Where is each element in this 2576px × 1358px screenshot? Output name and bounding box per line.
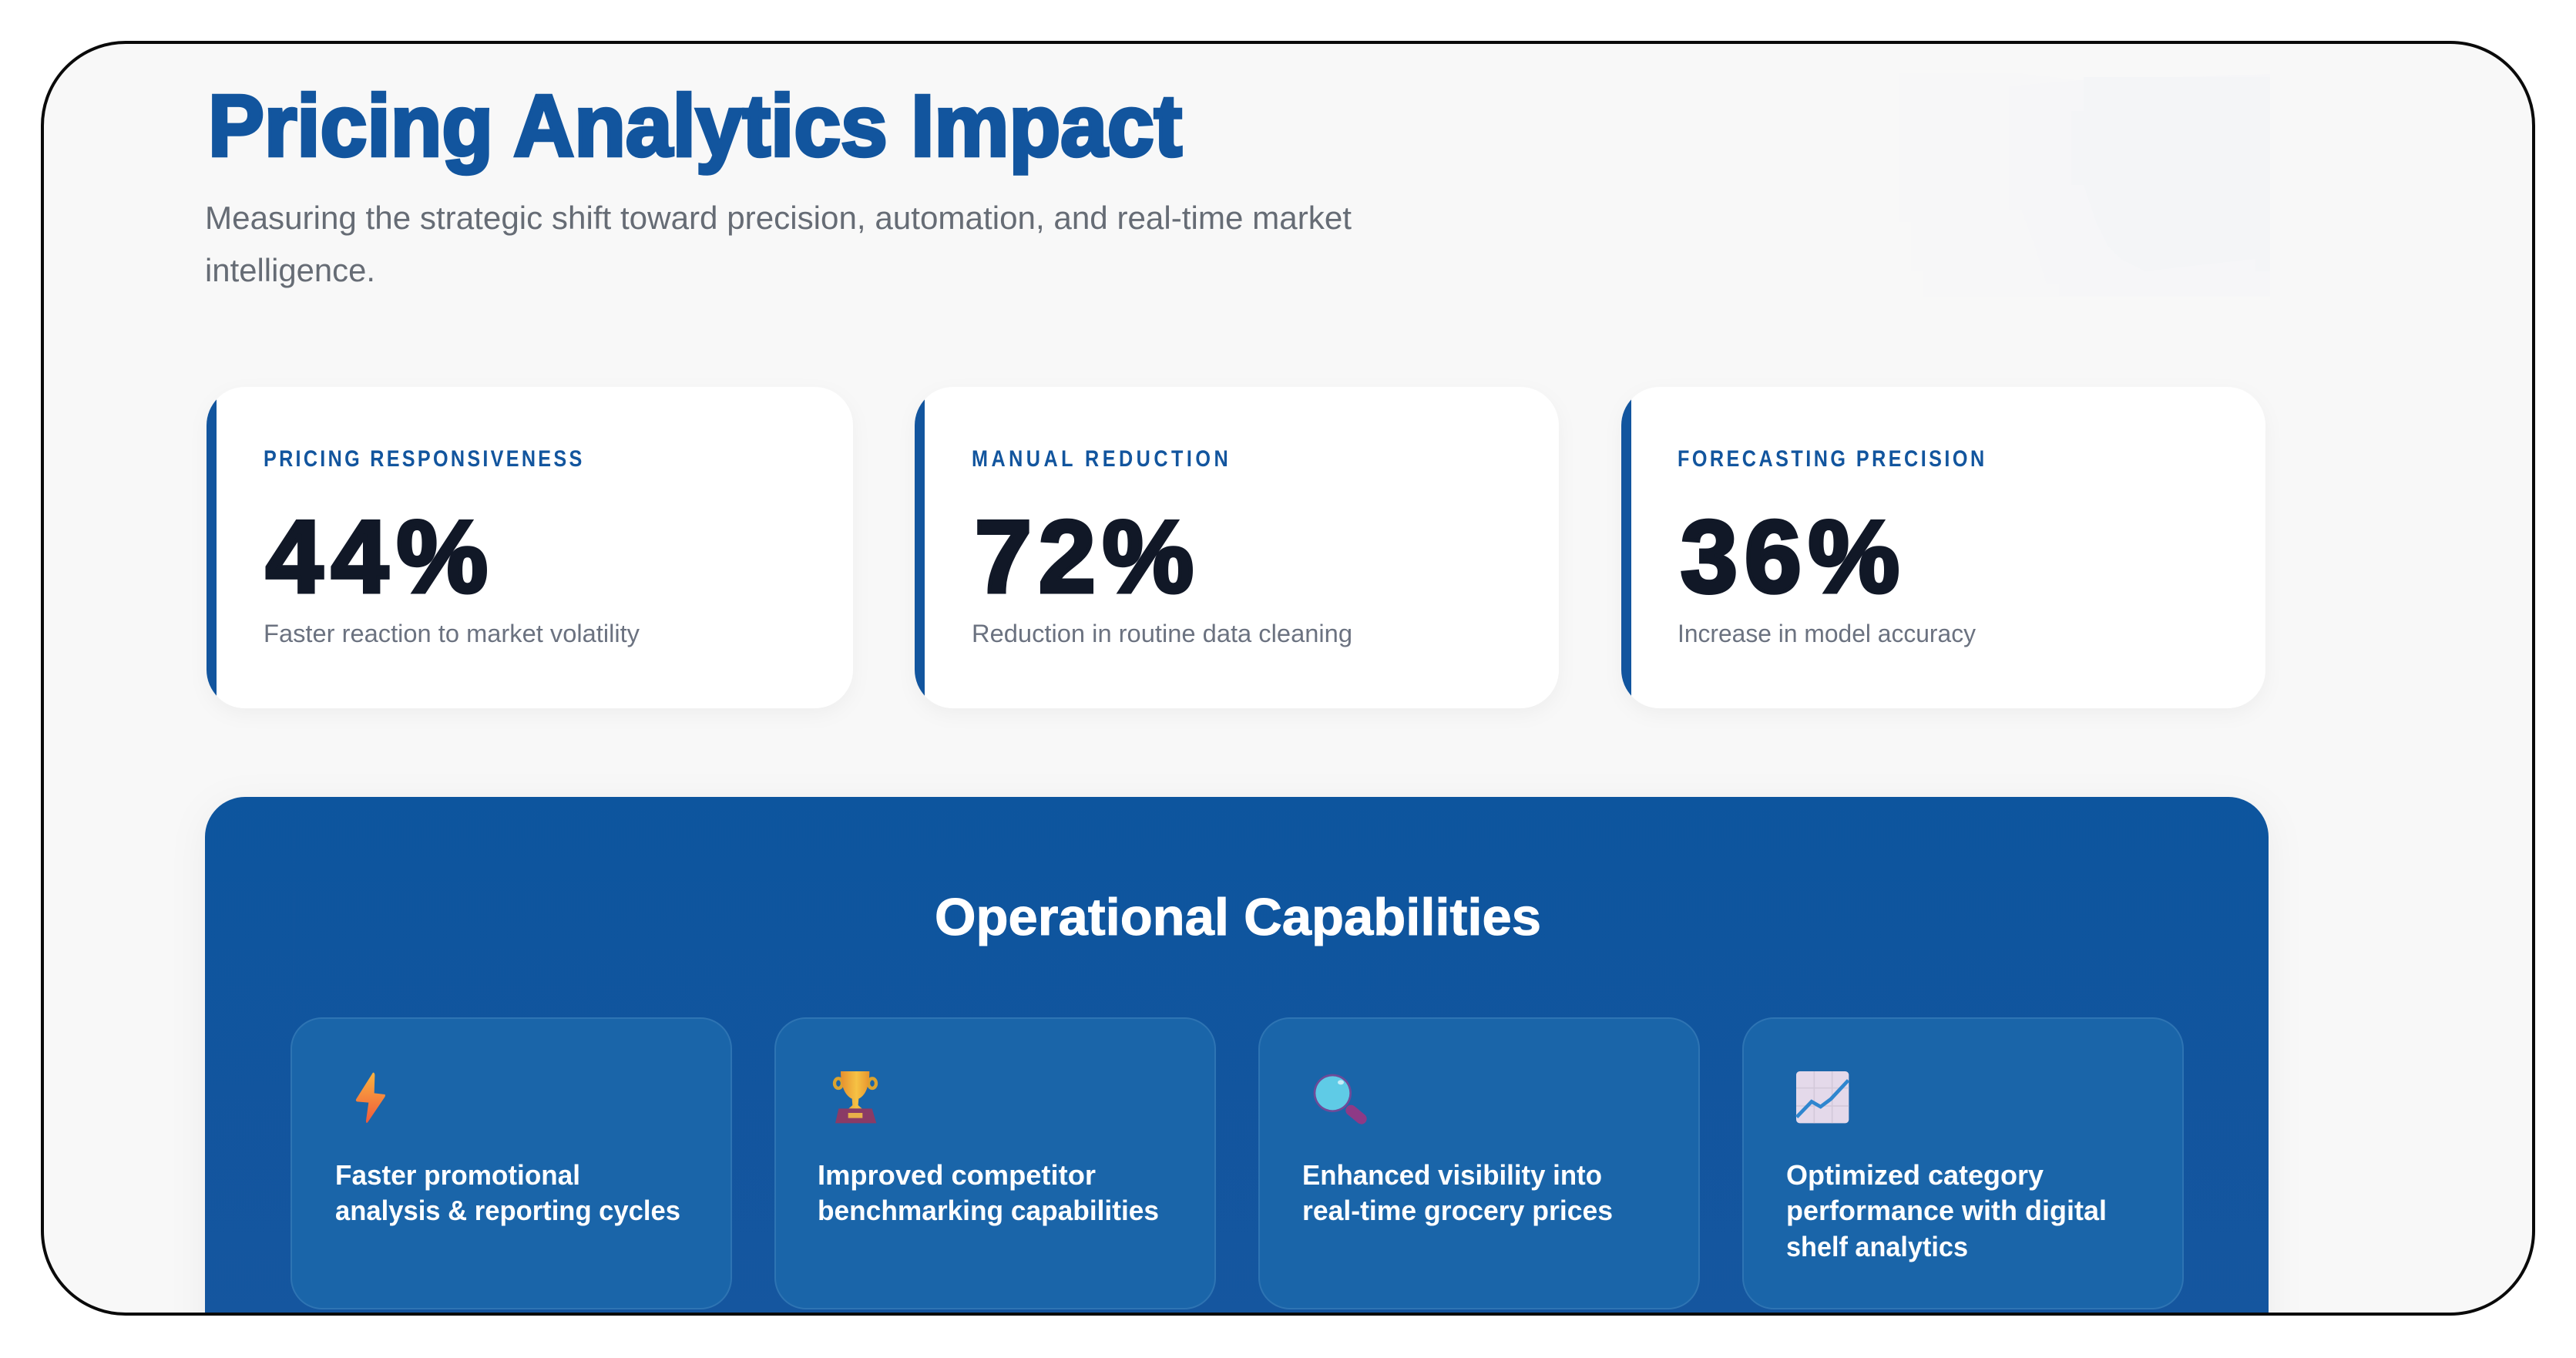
capability text: shelf analytics bbox=[1786, 1231, 1968, 1262]
icon: magnifying glass bbox=[1314, 1074, 1362, 1119]
icon: line chart bbox=[1796, 1071, 1849, 1123]
stat card: forecasting precision: 36% bbox=[1681, 500, 1899, 614]
capability card: category performance bbox=[1743, 1018, 2183, 1309]
stat card: forecasting precision: Increase in model accuracy bbox=[1678, 620, 1976, 647]
subtitle: Measuring the strategic shift toward precision, automation, and real-time market bbox=[205, 200, 1352, 236]
capability text: analysis & reporting cycles bbox=[335, 1195, 680, 1226]
icon: trophy bbox=[835, 1071, 876, 1123]
capability text bbox=[1302, 1159, 1613, 1226]
subtitle bbox=[205, 200, 1352, 288]
capability text bbox=[818, 1159, 1159, 1226]
stat card: manual reduction: 72% bbox=[975, 500, 1194, 614]
capability text: Faster promotional bbox=[335, 1159, 580, 1191]
stat card: pricing responsiveness bbox=[207, 399, 640, 696]
panel: operational capabilities bbox=[205, 797, 2269, 1358]
capability text: Improved competitor bbox=[818, 1159, 1096, 1191]
capability card: grocery visibility bbox=[1259, 1018, 1699, 1309]
capability text: real-time grocery prices bbox=[1302, 1195, 1613, 1226]
stat card: forecasting precision bbox=[1621, 399, 1983, 696]
subtitle: intelligence. bbox=[205, 252, 375, 288]
capability text: performance with digital bbox=[1786, 1195, 2107, 1226]
stat card: manual reduction bbox=[915, 399, 1351, 696]
clipped page content bbox=[205, 73, 2270, 1358]
stat card: pricing responsiveness: PRICING RESPONSIVENESS bbox=[264, 445, 582, 471]
stat card: pricing responsiveness: Faster reaction to market volatility bbox=[264, 620, 640, 647]
capability text bbox=[335, 1159, 680, 1226]
panel heading: Operational Capabilities bbox=[935, 888, 1541, 946]
decorative faint background shape bbox=[1899, 73, 2270, 297]
title: Pricing Analytics Impact bbox=[208, 77, 1182, 174]
capability text: Enhanced visibility into bbox=[1302, 1159, 1602, 1191]
icon: lightning bolt bbox=[356, 1073, 385, 1123]
capability card: competitor benchmarking bbox=[775, 1018, 1215, 1309]
stat card: manual reduction: Reduction in routine data cleaning bbox=[972, 620, 1352, 647]
capability text: Optimized category bbox=[1786, 1159, 2044, 1191]
stat card: pricing responsiveness: 44% bbox=[266, 500, 488, 614]
capability card: promotional analysis bbox=[291, 1018, 731, 1309]
capability text bbox=[1786, 1159, 2107, 1262]
stat card: forecasting precision: FORECASTING PRECISION bbox=[1678, 445, 1984, 471]
capability text: benchmarking capabilities bbox=[818, 1195, 1159, 1226]
stat card: manual reduction: MANUAL REDUCTION bbox=[972, 445, 1228, 471]
